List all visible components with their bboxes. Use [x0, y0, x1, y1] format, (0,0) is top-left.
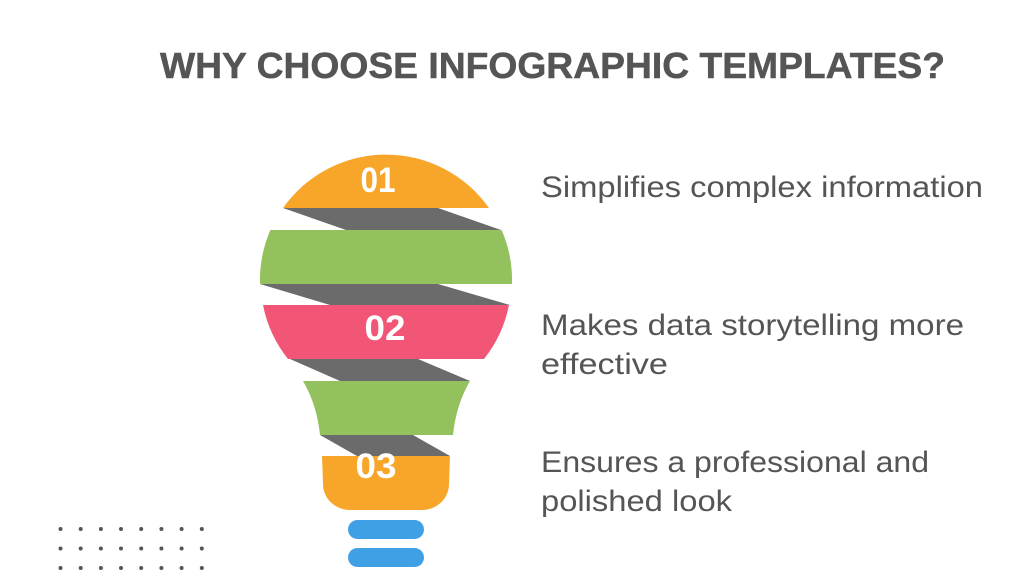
bulb segment 03: orange base — [322, 456, 450, 510]
gray connector 1 — [283, 208, 501, 230]
text: item 2: Makes data storytelling more — [541, 309, 964, 342]
number 02: 02 — [364, 309, 406, 348]
bulb segment 02: pink band — [263, 305, 509, 359]
screw thread 2 — [348, 548, 424, 567]
text: item 2: effective — [541, 348, 668, 381]
number 03: 03 — [356, 447, 396, 486]
lightbulb diagram — [260, 155, 512, 567]
gray connector 2 — [260, 284, 510, 305]
text: item 3 — [541, 446, 929, 518]
screw thread 1 — [348, 520, 424, 539]
gray connector 3 — [290, 359, 470, 381]
text: item 3: Ensures a professional and — [541, 446, 929, 479]
bulb segment: green neck — [303, 381, 470, 435]
gray connector 4 — [320, 435, 450, 456]
bulb segment: green band — [260, 230, 512, 284]
text: item 1: Simplifies complex information — [541, 171, 983, 204]
text: item 2 — [541, 309, 964, 381]
text: item 3: polished look — [541, 485, 733, 518]
number 01: 01 — [360, 161, 396, 200]
dot grid decoration — [58, 527, 204, 570]
title: WHY CHOOSE INFOGRAPHIC TEMPLATES? — [160, 45, 945, 86]
bulb segment 01: orange dome — [283, 155, 489, 208]
